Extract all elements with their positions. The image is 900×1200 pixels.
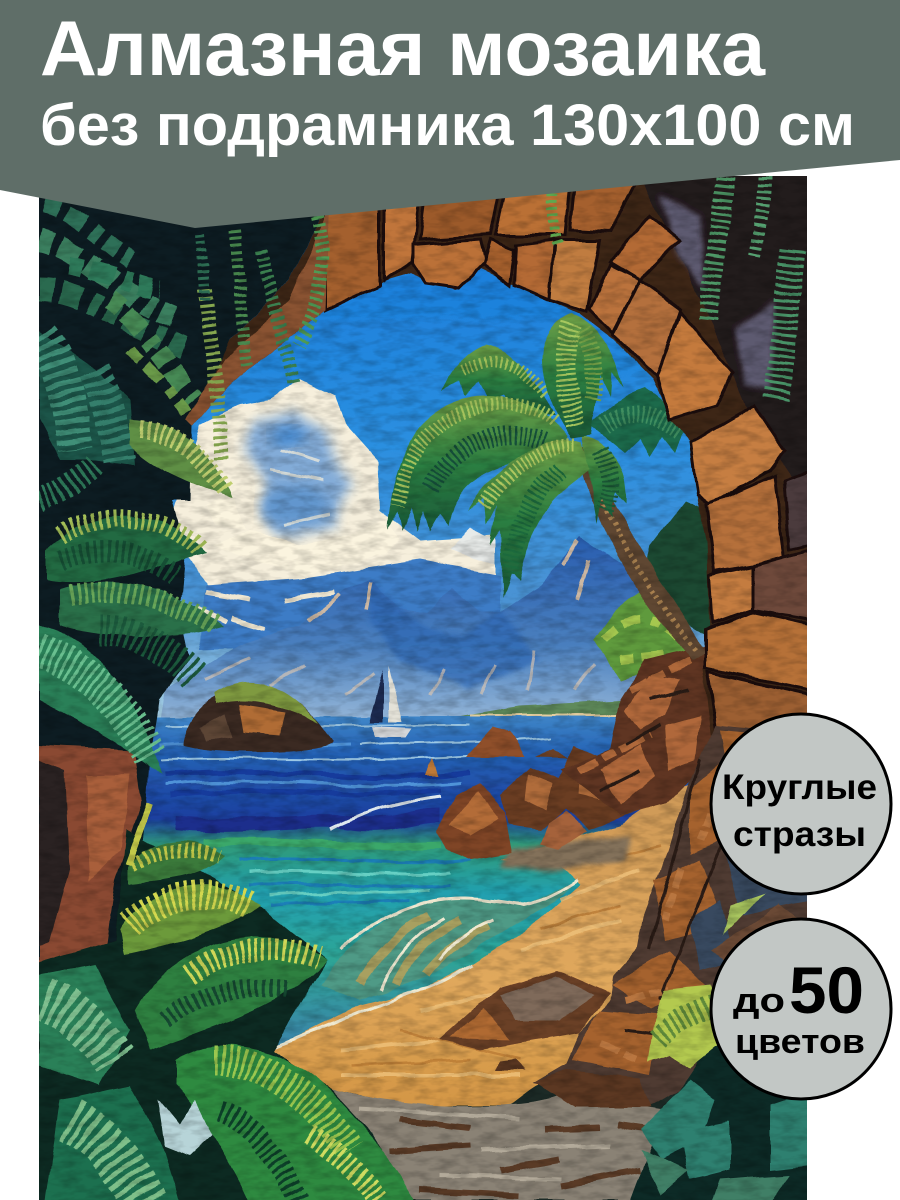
frond: lower centre [175,1046,416,1200]
frond: mid [45,517,206,583]
badge: up to 50 colours: 50 [789,953,864,1027]
frond: top [542,314,624,438]
frond: large green [135,937,326,1050]
frond: yellow [120,886,260,955]
arch stone blocks [326,172,812,750]
frond: yellow green [130,418,232,498]
rock column, lower right [533,725,815,1107]
sky [157,218,705,718]
white feather leaf [158,1098,212,1155]
waves [160,725,550,905]
foliage patches [39,205,195,420]
mountains [160,536,660,720]
sea [142,715,690,1046]
breaking wave with foam [268,880,577,1048]
badge: round rhinestones: стразы [733,815,866,854]
badge: up to 50 colours: цветов [735,1023,865,1061]
stone arch [180,170,815,750]
frond: upper left [441,344,555,415]
right shore rocks [560,645,725,815]
sea rocks [425,727,667,860]
frond: lower right [582,435,626,525]
trunk, left [39,745,142,965]
dark overhang, top right [644,176,807,477]
frond: long left [388,395,568,532]
hanging vines [200,215,322,460]
badge: round rhinestones: Круглые [722,768,877,807]
teal fronds, top left [39,330,135,465]
frond: lower mid [60,582,222,637]
jungle, left side [30,170,330,965]
sand beach [274,785,688,1106]
foliage, lower right [630,984,807,1200]
banner [0,0,900,228]
painting: tropical beach through a stone arch [30,170,820,1200]
sand strokes [340,835,660,1075]
frond: monstera left [39,965,130,1085]
base layer [332,1056,703,1200]
badge: round rhinestones [711,714,891,894]
title: Алмазная мозаика [40,4,766,92]
ferns, lower left [30,805,416,1200]
frond: lower left [468,440,590,598]
tree behind palm [594,500,712,680]
hanging vines, top right [551,176,792,400]
trunk [575,445,705,660]
far shore [460,700,620,716]
cloud [172,378,500,650]
frond: monstera bottom [45,1085,180,1200]
palm tree [388,314,705,660]
frond: right [590,388,696,456]
frond: small upper [128,841,225,885]
badge: up to 50 colours [711,919,891,1099]
rock island [183,682,333,752]
wet dark sand and path [332,1090,660,1200]
rock on the sand [440,970,650,1108]
sailboat [369,665,412,737]
badge: up to 50 colours: до [733,982,785,1020]
subtitle: без подрамника 130х100 см [40,93,855,158]
stone strip under the vines [185,205,330,427]
frond: large lower left [39,625,162,775]
